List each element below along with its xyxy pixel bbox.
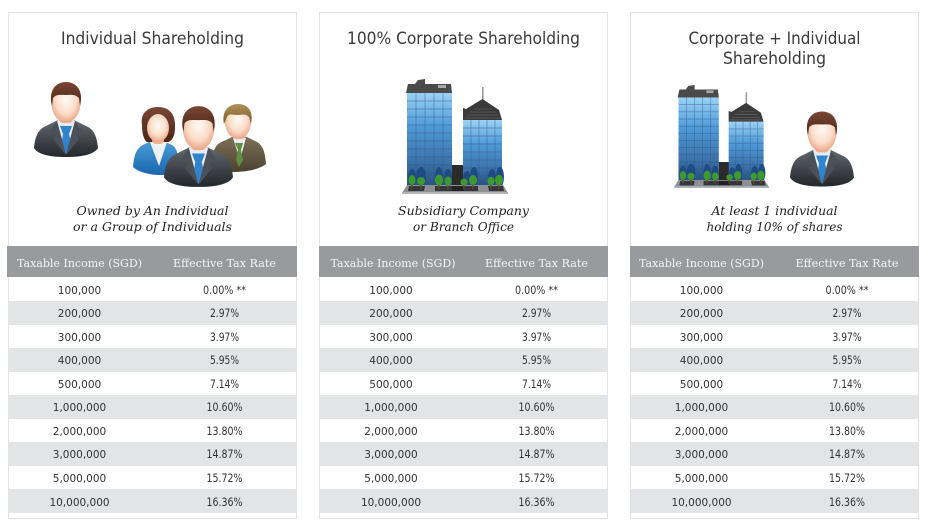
table: tax rates: 1,000,000 [675, 402, 728, 414]
table: tax rates: 5.95% [210, 353, 239, 367]
table: tax rates: 5,000,000 [675, 473, 728, 485]
table: tax rates: 16.36% [206, 495, 243, 509]
table: tax rates: Taxable Income (SGD) [330, 257, 456, 270]
subtitle: or Branch Office [413, 220, 514, 234]
table: tax rates: 2.97% [522, 306, 551, 320]
table: tax rates: 500,000 [58, 379, 101, 391]
table: tax rates: 100,000 [680, 285, 723, 297]
table: tax rates: 14.87% [206, 447, 243, 461]
table: tax rates: 15.72% [518, 471, 555, 485]
table: tax rates: 500,000 [369, 379, 413, 391]
table: tax rates: 10,000,000 [361, 497, 421, 509]
table: tax rates: 0.00% ** [203, 283, 246, 297]
icon: group of three people [133, 104, 266, 187]
table: tax rates: 1,000,000 [364, 402, 418, 414]
table: tax rates [319, 246, 608, 513]
table: tax rates: 3,000,000 [675, 449, 728, 461]
table: tax rates: 100,000 [58, 285, 101, 297]
table: tax rates: 14.87% [518, 447, 555, 461]
table: tax rates: 0.00% ** [515, 283, 558, 297]
subtitle [73, 204, 232, 234]
subtitle: Subsidiary Company [398, 204, 529, 218]
table: tax rates: 400,000 [369, 355, 413, 367]
table: tax rates: Effective Tax Rate [173, 257, 276, 270]
table: tax rates: 3.97% [522, 330, 551, 344]
table: tax rates: 5.95% [522, 353, 551, 367]
subtitle: holding 10% of shares [706, 220, 842, 234]
heading: individual shareholding: Individual Shareholding [61, 29, 244, 49]
table: tax rates [630, 246, 919, 513]
table: tax rates: 500,000 [680, 379, 723, 391]
table: tax rates: 10.60% [206, 400, 243, 414]
table: tax rates: 7.14% [522, 377, 551, 391]
table: tax rates: 10.60% [829, 400, 865, 414]
subtitle [706, 204, 842, 234]
table: tax rates: 15.72% [829, 471, 865, 485]
table: tax rates: 7.14% [832, 377, 862, 391]
icon: office towers [674, 85, 769, 188]
table: tax rates: 200,000 [58, 308, 101, 320]
icon: single businessman [34, 82, 98, 157]
table: tax rates: 200,000 [680, 308, 723, 320]
table: tax rates: 16.36% [518, 495, 555, 509]
table: tax rates: 3,000,000 [53, 449, 106, 461]
heading: corporate shareholding: 100% Corporate Shareholding [347, 29, 580, 49]
subtitle: or a Group of Individuals [73, 220, 232, 234]
table: tax rates: 10,000,000 [49, 497, 110, 509]
table: tax rates: 10.60% [518, 400, 555, 414]
table: tax rates: 2,000,000 [53, 426, 106, 438]
table: tax rates: 14.87% [829, 447, 865, 461]
panel: individual shareholding [7, 12, 297, 518]
table: tax rates: 3,000,000 [364, 449, 418, 461]
table: tax rates: Effective Tax Rate [485, 257, 588, 270]
table: tax rates: 16.36% [829, 495, 865, 509]
icon: office towers [402, 79, 508, 194]
table: tax rates: 0.00% ** [826, 283, 869, 297]
subtitle [398, 204, 529, 234]
table: tax rates: 2,000,000 [364, 426, 418, 438]
table: tax rates: 5,000,000 [53, 473, 106, 485]
table: tax rates: 3.97% [832, 330, 862, 344]
table: tax rates: 15.72% [206, 471, 243, 485]
table: tax rates: 5,000,000 [364, 473, 418, 485]
table: tax rates: 13.80% [206, 424, 243, 438]
subtitle: Owned by An Individual [76, 204, 229, 218]
table: tax rates: 7.14% [210, 377, 239, 391]
table: tax rates: 300,000 [369, 332, 413, 344]
table: tax rates: 10,000,000 [671, 497, 732, 509]
table: tax rates: 13.80% [518, 424, 555, 438]
icon: single businessman [790, 112, 854, 186]
heading: corporate + individual shareholding: Shareholding [723, 49, 826, 69]
panel: corporate + individual shareholding [630, 12, 919, 518]
table: tax rates: 5.95% [832, 353, 862, 367]
table: tax rates: 3.97% [210, 330, 239, 344]
table: tax rates: 400,000 [58, 355, 101, 367]
table: tax rates: Taxable Income (SGD) [17, 257, 142, 270]
table: tax rates: Taxable Income (SGD) [639, 257, 764, 270]
heading: corporate + individual shareholding: Corporate + Individual [688, 29, 860, 49]
table: tax rates: 400,000 [680, 355, 723, 367]
heading: corporate + individual shareholding [688, 29, 860, 69]
subtitle: At least 1 individual [710, 204, 838, 218]
table: tax rates: 13.80% [829, 424, 865, 438]
table: tax rates: 2.97% [210, 306, 239, 320]
table: tax rates: 200,000 [369, 308, 413, 320]
table: tax rates: 100,000 [369, 285, 413, 297]
table: tax rates [7, 246, 297, 513]
table: tax rates: 300,000 [58, 332, 101, 344]
table: tax rates: 2,000,000 [675, 426, 728, 438]
panel: 100% corporate shareholding [319, 12, 608, 518]
table: tax rates: Effective Tax Rate [796, 257, 898, 270]
table: tax rates: 300,000 [680, 332, 723, 344]
table: tax rates: 1,000,000 [53, 402, 106, 414]
table: tax rates: 2.97% [832, 306, 862, 320]
